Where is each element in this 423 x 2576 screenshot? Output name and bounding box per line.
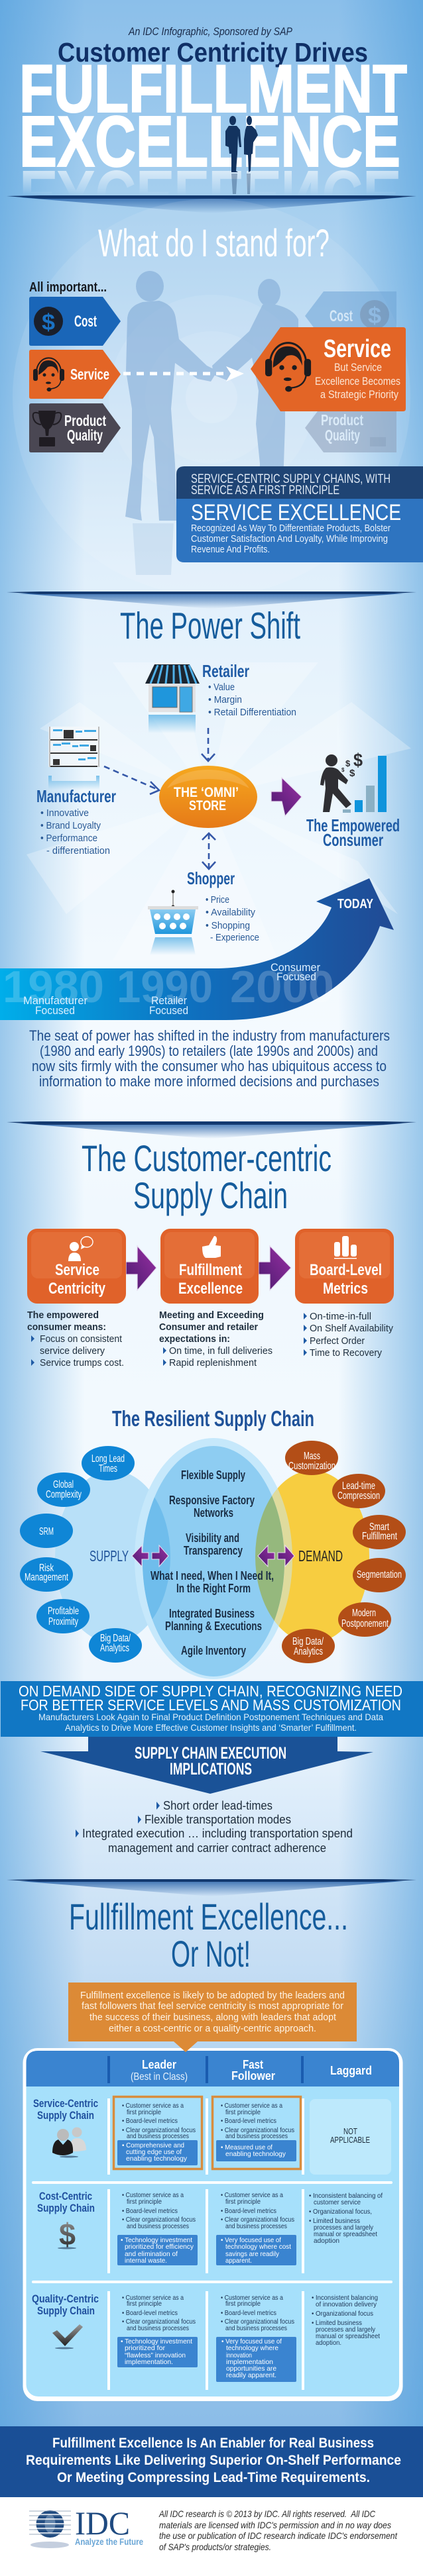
demand bubbles: Lead-time <box>342 1480 375 1492</box>
row: quality-centric fast follower: technology where <box>226 2344 278 2352</box>
text: fulfillment excellence details <box>159 1310 272 1368</box>
conclusion banner: Requirements Like Delivering Superior On-Shelf Performance <box>26 2453 401 2468</box>
dashed arrow <box>123 366 244 382</box>
supply bubbles: Global <box>53 1479 74 1490</box>
heading: Or Not! <box>171 1933 251 1975</box>
ghost cost tag: $ <box>368 303 381 329</box>
service tag <box>29 350 121 399</box>
icon: empowered consumer: $ <box>353 750 363 770</box>
row: cost-centric leader: first principle <box>127 2198 162 2206</box>
icon: empowered consumer: $ <box>341 767 345 773</box>
execution implications list <box>76 1799 353 1855</box>
service excellence panel <box>176 466 423 562</box>
row: quality-centric fast follower: • Very focused use of <box>221 2338 282 2345</box>
demand double arrow <box>258 1545 294 1567</box>
section divider <box>7 195 416 213</box>
IDC logo: Analyze the Future <box>75 2536 143 2547</box>
shopper text: Shopper <box>187 868 235 888</box>
row: cost-centric fast follower: first principle <box>225 2198 261 2206</box>
demand side banner: Manufacturers Look Again to Final Product Definition Postponement Techniques and Data <box>38 1712 383 1722</box>
box: fulfillment excellence: Excellence <box>178 1280 243 1298</box>
conclusion banner: Or Meeting Compressing Lead-Time Requirements. <box>57 2470 370 2485</box>
centre capabilities: Responsive Factory <box>169 1494 255 1507</box>
row: cost-centric leader: and business processes <box>127 2222 189 2230</box>
omni store: THE ‘OMNI’ <box>174 785 239 800</box>
demand side banner: Analytics to Drive More Effective Customer Insights and ‘Smarter’ Fulfillment. <box>65 1722 357 1733</box>
row: quality-centric leader <box>117 2294 198 2367</box>
supply bubbles: Times <box>99 1463 117 1474</box>
row: service-centric leader: enabling technology <box>126 2155 188 2163</box>
row: cost-centric laggard: adoption <box>314 2237 339 2245</box>
icon: headset agent <box>33 358 64 391</box>
omni store <box>159 766 257 828</box>
product quality tag: Product <box>64 412 106 429</box>
row: quality-centric label: Quality-Centric <box>32 2293 99 2305</box>
ghost product quality tag <box>305 403 396 452</box>
row: service-centric label: Supply Chain <box>37 2109 94 2122</box>
power shift paragraph: information to make more informed decisions and purchases <box>39 1073 379 1090</box>
icon: empowered consumer: $ <box>349 768 355 779</box>
retailer text: • Margin <box>208 694 242 705</box>
icon: headset agent large <box>265 343 311 391</box>
row: cost-centric label: Cost-Centric <box>39 2190 92 2202</box>
copyright notice <box>158 2508 398 2552</box>
row: cost-centric laggard: • Inconsistent balancing of <box>309 2192 383 2200</box>
row: service-centric label <box>33 2097 98 2158</box>
row: cost-centric leader: • Customer service as a <box>122 2191 184 2199</box>
supply bubbles: Big Data/ <box>100 1633 131 1644</box>
conclusion banner <box>0 2426 423 2497</box>
empowered consumer label <box>306 815 400 850</box>
row: cost-centric fast follower: • Very focused use of <box>221 2236 281 2244</box>
supply chain execution arrow: IMPLICATIONS <box>170 1760 252 1778</box>
centre capabilities: Visibility and <box>186 1531 239 1545</box>
big service callout: a Strategic Priority <box>320 388 398 401</box>
supply bubbles: Proximity <box>48 1616 78 1627</box>
cost tag: $ <box>42 310 55 335</box>
icon: trophy <box>33 411 61 446</box>
demand bubbles: Modern <box>352 1608 376 1619</box>
supply bubbles: Complexity <box>46 1489 82 1500</box>
timeline arrow: Focused <box>276 970 316 983</box>
icon: shelf <box>48 727 99 790</box>
callout: fast followers that feel service centricity is most appropriate for <box>82 2000 343 2012</box>
timeline arrow: 2000 <box>230 962 334 1012</box>
panel: what do I stand for <box>13 199 423 596</box>
row: quality-centric laggard: manual or spreadsheet <box>316 2332 380 2340</box>
row: service-centric leader: first principle <box>127 2108 161 2116</box>
manufacturer text: - differentiation <box>46 845 110 856</box>
timeline arrow <box>0 878 394 1020</box>
big service callout: Excellence Becomes <box>315 375 400 387</box>
supply bubbles: Management <box>25 1572 68 1583</box>
service excellence panel: SERVICE AS A FIRST PRINCIPLE <box>191 484 339 497</box>
panel: the power shift <box>0 605 411 1090</box>
demand bubbles: Big Data/ <box>292 1636 324 1647</box>
row: cost-centric fast follower: • Customer service as a <box>221 2191 283 2199</box>
supply bubbles: Risk <box>39 1563 54 1574</box>
row: quality-centric leader: • Customer service as a <box>122 2294 184 2302</box>
table frame <box>23 2048 403 2401</box>
row: service-centric fast follower: enabling technology <box>225 2150 286 2158</box>
comparison table <box>23 2048 403 2401</box>
table header: Leader <box>142 2058 176 2071</box>
panel: resilient supply chain <box>20 1406 406 1679</box>
row: cost-centric label: Supply Chain <box>37 2202 95 2214</box>
execution implications list: Integrated execution … including transportation spend <box>82 1827 353 1840</box>
box: board-level metrics <box>295 1229 394 1304</box>
table header: Follower <box>231 2069 275 2083</box>
row: quality-centric leader: prioritized for <box>125 2344 165 2352</box>
radiating rays <box>27 662 411 960</box>
text: fulfillment excellence details: Rapid replenishment <box>169 1357 257 1368</box>
table header: Fast <box>243 2058 263 2071</box>
demand bubbles: Customization <box>288 1461 335 1472</box>
shopper text: • Shopping <box>206 920 250 931</box>
venn diagram <box>55 1438 369 1679</box>
box: board-level metrics: Board-Level <box>310 1261 382 1279</box>
product quality tag <box>29 403 121 452</box>
icon: basket <box>148 890 198 955</box>
arrow: manufacturer to store <box>104 766 159 794</box>
shopper text: - Experience <box>210 932 259 943</box>
row: cost-centric fast follower: • Clear organizational focus <box>221 2216 294 2224</box>
row: quality-centric laggard: • Limited business <box>312 2319 362 2327</box>
icon: dollar: $ <box>59 2217 76 2251</box>
centre capabilities: Agile Inventory <box>181 1644 246 1657</box>
row: service-centric laggard: APPLICABLE <box>330 2135 370 2145</box>
row: quality-centric laggard: adoption. <box>316 2339 341 2347</box>
demand side banner <box>1 1681 423 1737</box>
centre capabilities: Planning & Executions <box>165 1620 262 1633</box>
manufacturer text: • Brand Loyalty <box>40 820 101 831</box>
service tag: Service <box>70 366 109 383</box>
row: cost-centric laggard: • Organizational focus, <box>309 2208 372 2216</box>
text: board metrics details <box>304 1311 393 1359</box>
timeline arrow: Consumer <box>271 961 320 974</box>
timeline arrow: Manufacturer <box>23 994 88 1007</box>
shopper text: • Availability <box>206 907 255 918</box>
text: board metrics details: On-time-in-full <box>310 1311 371 1322</box>
demand bubbles <box>282 1441 406 1663</box>
arrow 2 <box>259 1246 291 1290</box>
empowered consumer label: Consumer <box>323 830 383 850</box>
demand bubbles: Analytics <box>294 1646 323 1657</box>
ghost cost tag: Cost <box>330 307 353 325</box>
row: quality-centric fast follower: and business processes <box>225 2324 287 2332</box>
heading: The Power Shift <box>120 605 300 647</box>
arrow: to empowered consumer <box>271 778 302 816</box>
service excellence panel: Recognized As Way To Differentiate Products, Bolster <box>191 523 391 534</box>
icon: empowered consumer <box>320 750 387 813</box>
row: quality-centric laggard: processes and largely <box>316 2326 376 2334</box>
arrow 1 <box>126 1246 156 1290</box>
timeline arrow: TODAY <box>337 897 374 911</box>
row: cost-centric fast follower: apparent. <box>225 2257 252 2265</box>
row: quality-centric fast follower: innovation <box>226 2351 252 2359</box>
row: service-centric laggard: NOT <box>343 2126 357 2136</box>
table header <box>107 2056 372 2083</box>
row: quality-centric fast follower: first principle <box>225 2300 261 2308</box>
conclusion banner: Fulfillment Excellence Is An Enabler for Real Business <box>52 2436 374 2451</box>
row: quality-centric leader: • Board-level metrics <box>122 2309 178 2317</box>
table header: Laggard <box>330 2064 372 2077</box>
execution implications list: Short order lead-times <box>163 1799 272 1812</box>
timeline arrow: Focused <box>35 1004 75 1017</box>
supply bubbles: Analytics <box>100 1643 129 1654</box>
big service callout: Service <box>324 335 391 363</box>
box: board-level metrics: Metrics <box>323 1280 368 1298</box>
box: service centricity <box>27 1229 126 1304</box>
manufacturer text: • Innovative <box>40 807 89 819</box>
all important label: All important... <box>29 280 107 295</box>
centre capabilities: In the Right Form <box>176 1582 251 1595</box>
demand bubbles: Postponement <box>341 1618 389 1629</box>
retailer text: • Retail Differentiation <box>208 707 296 718</box>
row: service-centric laggard <box>310 2099 391 2175</box>
demand bubbles: Fulfillment <box>362 1531 397 1542</box>
supply chain execution arrow: SUPPLY CHAIN EXECUTION <box>135 1744 286 1763</box>
row: cost-centric label <box>37 2190 95 2251</box>
sponsor line: An IDC Infographic, Sponsored by SAP <box>128 26 292 38</box>
row: quality-centric laggard <box>312 2294 380 2347</box>
row: service-centric fast follower: • Board-level metrics <box>221 2117 276 2125</box>
centre capabilities <box>151 1468 274 1657</box>
row: cost-centric fast follower: • Board-level metrics <box>221 2207 276 2215</box>
row: cost-centric fast follower: technology where cost <box>225 2243 291 2251</box>
IDC logo: IDC <box>75 2504 130 2542</box>
demand bubbles: Smart <box>369 1521 389 1533</box>
row: service-centric fast follower: • Measured use of <box>221 2143 272 2151</box>
section divider <box>7 592 416 609</box>
row: service-centric fast follower <box>212 2097 301 2169</box>
shopper text <box>187 868 259 943</box>
box: fulfillment excellence <box>160 1229 259 1304</box>
box: service centricity: Service <box>55 1261 99 1279</box>
row: cost-centric laggard: manual or spreadsheet <box>314 2230 377 2238</box>
demand label: DEMAND <box>298 1547 343 1565</box>
supply bubbles: Long Lead <box>91 1453 125 1465</box>
row: service-centric leader: and business processes <box>127 2132 189 2140</box>
big service callout: But Service <box>334 361 382 374</box>
row: cost-centric leader: and elimination of <box>125 2250 178 2258</box>
centre capabilities: Integrated Business <box>169 1607 255 1620</box>
row: service-centric fast follower: • Customer service as a <box>221 2102 282 2110</box>
row: quality-centric leader: implementation. <box>125 2358 173 2366</box>
row: quality-centric laggard: • Inconsistent balancing <box>312 2294 378 2302</box>
row: cost-centric leader: • Technology investment <box>121 2236 192 2244</box>
table header: (Best in Class) <box>131 2071 188 2083</box>
icon: thumbs up <box>202 1236 221 1258</box>
execution implications list: management and carrier contract adherence <box>108 1841 326 1855</box>
handshake silhouettes <box>125 271 298 575</box>
callout <box>68 1983 357 2052</box>
row: quality-centric fast follower: readily apparent. <box>226 2371 276 2379</box>
text: board metrics details: Perfect Order <box>310 1335 365 1347</box>
icon: check mark <box>52 2324 83 2349</box>
service excellence panel: Customer Satisfaction And Loyalty, While Improving <box>191 534 388 544</box>
row: cost-centric fast follower: and business processes <box>225 2222 287 2230</box>
copyright notice: All IDC research is © 2013 by IDC. All rights reserved. All IDC <box>158 2508 376 2519</box>
timeline arrow: 1980 <box>3 962 104 1012</box>
ghost product quality tag: Quality <box>325 427 360 444</box>
row: cost-centric laggard: processes and largely <box>314 2224 374 2232</box>
omni store: STORE <box>189 798 226 813</box>
manufacturer text <box>36 786 116 856</box>
timeline arrow: 1990 <box>117 962 213 1012</box>
icon: bars <box>334 1236 357 1259</box>
icon: store <box>145 664 200 733</box>
row: service-centric leader: cutting edge use of <box>126 2148 182 2156</box>
timeline arrow: Focused <box>149 1004 188 1017</box>
arrow: retailer to store <box>202 728 215 761</box>
retailer text: Retailer <box>202 661 249 681</box>
row: quality-centric leader: and business processes <box>127 2324 189 2332</box>
row: cost-centric leader: • Clear organizational focus <box>122 2216 196 2224</box>
icon: person with speech bubble <box>68 1237 93 1261</box>
icon: empowered consumer: $ <box>345 758 351 768</box>
panel: fulfillment excellence or not <box>23 1896 403 2401</box>
row: quality-centric fast follower: • Board-level metrics <box>221 2309 276 2317</box>
manufacturer text: • Performance <box>40 833 97 844</box>
text: fulfillment excellence details: expectations in: <box>159 1333 230 1345</box>
row: service-centric leader: • Clear organizational focus <box>122 2126 196 2134</box>
concentric background circles <box>13 199 410 596</box>
row: cost-centric fast follower: savings are readily <box>225 2250 280 2258</box>
supply double arrow <box>132 1545 168 1567</box>
supply bubbles <box>20 1446 142 1663</box>
section divider <box>7 1879 416 1896</box>
footer <box>0 2497 423 2576</box>
row: cost-centric leader: prioritized for efficiency <box>125 2243 194 2251</box>
big service callout <box>251 327 406 411</box>
heading: Supply Chain <box>133 1174 288 1216</box>
row: quality-centric fast follower <box>216 2294 296 2382</box>
timeline arrow: Retailer <box>151 994 187 1007</box>
row: service-centric fast follower: first principle <box>225 2108 261 2116</box>
row: cost-centric laggard <box>309 2192 383 2245</box>
section divider <box>7 1121 416 1139</box>
ghost cost tag <box>305 291 396 340</box>
text: service centricity details: Service trumps cost. <box>40 1357 124 1368</box>
callout: the success of their business, along with leaders that adopt <box>90 2012 337 2023</box>
row: quality-centric leader: “flawless” innovation <box>125 2351 186 2359</box>
icon: two people <box>52 2128 86 2158</box>
retailer text: • Value <box>208 682 235 693</box>
row: quality-centric fast follower: • Customer service as a <box>221 2294 283 2302</box>
row: cost-centric leader: internal waste. <box>125 2257 167 2265</box>
text: board metrics details: On Shelf Availability <box>310 1323 393 1334</box>
heading <box>69 1896 348 1975</box>
box: fulfillment excellence: Fulfillment <box>179 1261 242 1279</box>
cost tag: Cost <box>74 313 97 331</box>
cost tag <box>29 297 121 346</box>
centre capabilities: Networks <box>194 1506 233 1520</box>
row: service-centric leader: • Customer service as a <box>122 2102 184 2110</box>
IDC logo <box>29 2504 143 2548</box>
row: service-centric fast follower: • Clear organizational focus <box>221 2126 294 2134</box>
text: fulfillment excellence details: On time, in full deliveries <box>169 1345 272 1357</box>
centre capabilities: Flexible Supply <box>181 1468 245 1482</box>
row: service-centric label: Service-Centric <box>33 2097 98 2110</box>
row: cost-centric fast follower <box>216 2191 296 2265</box>
copyright notice: materials are licensed with IDC's permission and in no way does <box>159 2520 391 2530</box>
heading <box>82 1137 332 1216</box>
callout: either a cost-centric or a quality-centric approach. <box>109 2023 316 2034</box>
row: service-centric leader <box>114 2097 202 2169</box>
row: quality-centric fast follower: implementation <box>226 2358 273 2366</box>
table separators <box>32 2098 393 2390</box>
row: quality-centric leader: • Clear organizational focus <box>122 2318 196 2326</box>
execution implications list: Flexible transportation modes <box>145 1813 291 1826</box>
row: quality-centric label: Supply Chain <box>37 2304 95 2317</box>
ghost product quality tag: Product <box>321 411 363 429</box>
row: service-centric leader: • Comprehensive and <box>122 2141 184 2149</box>
row: service-centric leader: • Board-level metrics <box>122 2117 178 2125</box>
row: service-centric fast follower: and business processes <box>225 2132 288 2140</box>
row: cost-centric laggard: • Limited business <box>309 2217 360 2225</box>
centre capabilities: What I need, When I Need It, <box>151 1569 274 1582</box>
panel: customer-centric supply chain <box>27 1137 394 1368</box>
centre capabilities: Transparency <box>184 1544 243 1557</box>
service excellence panel: Revenue And Profits. <box>191 544 270 555</box>
shopper text: • Price <box>206 894 229 905</box>
text: service centricity details <box>27 1310 124 1368</box>
power shift paragraph <box>29 1027 390 1090</box>
supply label: SUPPLY <box>90 1547 129 1565</box>
row: cost-centric leader <box>117 2191 198 2265</box>
supply bubbles: SRM <box>39 1526 54 1537</box>
row: cost-centric laggard: customer service <box>314 2198 361 2206</box>
row: quality-centric laggard: of innovation delivery <box>316 2300 377 2308</box>
supply bubbles: Profitable <box>48 1606 79 1617</box>
copyright notice: of SAP's products/or strategies. <box>159 2542 271 2552</box>
demand bubbles: Compression <box>337 1490 380 1502</box>
row: quality-centric fast follower: • Clear organizational focus <box>221 2318 294 2326</box>
text: service centricity details: consumer means: <box>27 1321 106 1333</box>
text: fulfillment excellence details: Consumer and retailer <box>159 1321 258 1333</box>
arrow: store and shopper <box>202 833 215 869</box>
heading: The Resilient Supply Chain <box>112 1406 314 1431</box>
product quality tag: Quality <box>67 427 103 444</box>
text: service centricity details: Focus on consistent <box>40 1333 123 1345</box>
row: quality-centric laggard: • Organizational focus <box>312 2310 373 2318</box>
row: quality-centric leader: • Technology investment <box>121 2338 192 2345</box>
header <box>23 27 407 194</box>
demand bubbles: Mass <box>304 1451 320 1462</box>
title line: Customer Centricity Drives <box>58 37 368 68</box>
supply chain execution arrow <box>40 1737 373 1794</box>
callout: Fulfillment excellence is likely to be adopted by the leaders and <box>80 1990 345 2001</box>
silhouettes of two business people <box>225 116 258 194</box>
demand bubbles: Segmentation <box>357 1569 402 1580</box>
text: service centricity details: service delivery <box>40 1345 105 1357</box>
row: cost-centric leader: • Board-level metrics <box>122 2207 178 2215</box>
row: quality-centric label <box>32 2293 99 2349</box>
text: service centricity details: The empowered <box>27 1310 99 1321</box>
manufacturer text: Manufacturer <box>36 786 116 806</box>
box: service centricity: Centricity <box>48 1280 106 1298</box>
retailer text <box>202 661 296 718</box>
row: quality-centric fast follower: opportunities are <box>226 2365 276 2373</box>
text: fulfillment excellence details: Meeting and Exceeding <box>159 1310 264 1321</box>
text: board metrics details: Time to Recovery <box>310 1347 382 1359</box>
row: quality-centric leader: first principle <box>127 2300 162 2308</box>
